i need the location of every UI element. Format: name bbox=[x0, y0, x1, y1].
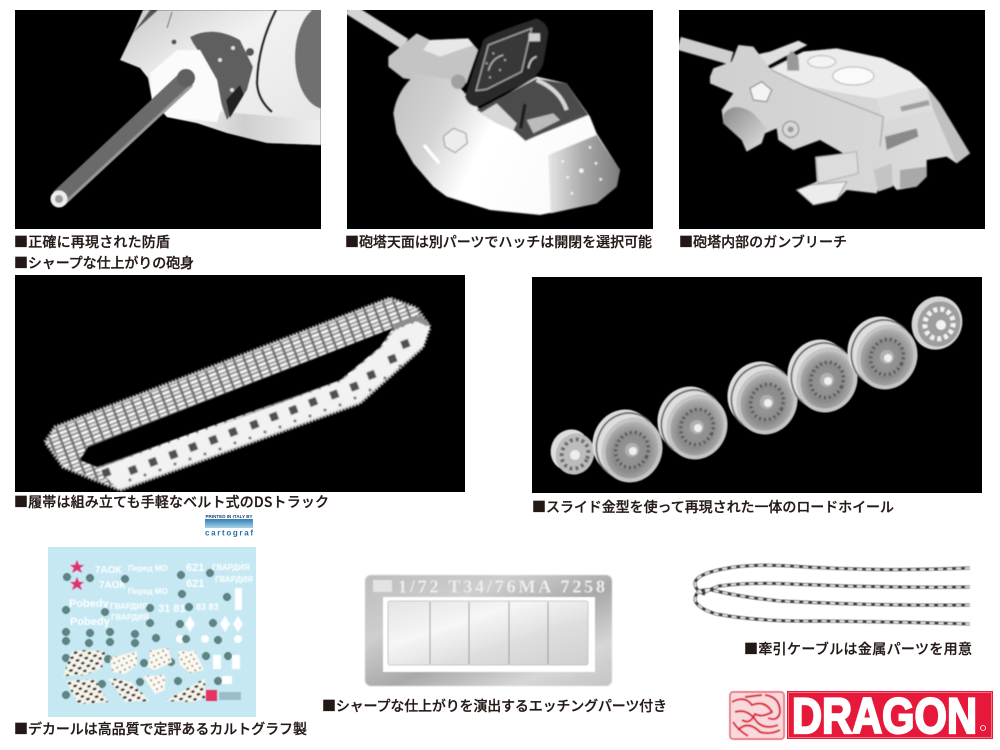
road wheel 5 bbox=[837, 306, 928, 400]
road wheel 3 bbox=[717, 351, 808, 445]
panel: turret with open hatch bbox=[347, 8, 653, 229]
red stars bbox=[70, 560, 84, 590]
white markings: ГВАРДИЯ bbox=[212, 563, 250, 572]
white markings: ГВАРДИЯ bbox=[215, 575, 253, 584]
fret window bbox=[383, 597, 595, 672]
turret cutaway render bbox=[679, 41, 970, 205]
small right wheel bbox=[903, 288, 971, 358]
caption: cables: ■牽引ケーブルは金属パーツを用意 bbox=[744, 639, 972, 659]
turret render bbox=[348, 8, 620, 215]
white markings: Pobedy bbox=[69, 598, 110, 610]
white markings: 621 bbox=[186, 562, 204, 574]
white markings bbox=[69, 562, 253, 628]
caption: road wheels: ■スライド金型を使って再現された一体のロードホイール bbox=[532, 497, 894, 517]
dragon emblem bbox=[730, 692, 784, 739]
logo: cartograf: cartograf bbox=[205, 528, 253, 538]
white markings: 621 bbox=[186, 578, 204, 590]
road wheel 4 bbox=[777, 329, 868, 423]
turret body and mantlet bbox=[120, 10, 321, 146]
road wheel 2 bbox=[647, 376, 738, 470]
caption: decal: ■デカールは高品質で定評あるカルトグラフ製 bbox=[14, 719, 307, 739]
white markings: Перед МО bbox=[128, 587, 168, 596]
gun barrel bbox=[50, 69, 195, 208]
white markings: ГВАРДИЯ bbox=[111, 613, 149, 622]
panel: gun mantlet render bbox=[15, 10, 321, 229]
caption: mantlet: ■正確に再現された防盾 bbox=[14, 232, 170, 252]
road wheel 1 bbox=[582, 399, 673, 493]
decal sheet bbox=[48, 547, 256, 717]
white markings: ГВАРДИЯ bbox=[110, 602, 148, 611]
caption: hatch: ■砲塔天面は別パーツでハッチは開閉を選択可能 bbox=[345, 232, 652, 252]
panel: road wheels bbox=[532, 277, 982, 493]
logo: DRAGON bbox=[730, 688, 993, 744]
logo: cartograf bbox=[205, 514, 253, 538]
caption: etching: ■シャープな仕上がりを演出するエッチングパーツ付き bbox=[322, 696, 667, 716]
camouflage patches bbox=[63, 650, 105, 676]
white markings: 7АОК bbox=[99, 580, 126, 591]
panel: turret interior breech bbox=[679, 10, 985, 229]
fret emblem bbox=[373, 580, 392, 592]
caption: track: ■履帯は組み立ても手軽なベルト式のDSトラック bbox=[14, 492, 329, 512]
white markings: 83 83 bbox=[196, 602, 219, 612]
numbered roundels bbox=[62, 569, 232, 699]
photo-etched fret bbox=[365, 575, 612, 686]
small left wheel bbox=[544, 423, 601, 481]
logo: cartograf: PRINTED IN ITALY BY bbox=[206, 514, 252, 519]
white markings: Перед МО bbox=[128, 564, 168, 573]
caption: barrel: ■シャープな仕上がりの砲身 bbox=[14, 253, 194, 273]
white markings: 7АОК bbox=[95, 565, 122, 576]
caption: breech: ■砲塔内部のガンブリーチ bbox=[679, 232, 847, 252]
white markings: 31 81 bbox=[158, 603, 186, 615]
panel: DS track bbox=[15, 275, 465, 492]
white markings: Pobedy bbox=[70, 616, 111, 628]
tow cables bbox=[695, 565, 970, 624]
dragon mark on sheet bbox=[206, 690, 217, 701]
fret marking: 1/72 T34/76MA 7258 bbox=[398, 576, 605, 596]
track loop bbox=[45, 298, 430, 490]
